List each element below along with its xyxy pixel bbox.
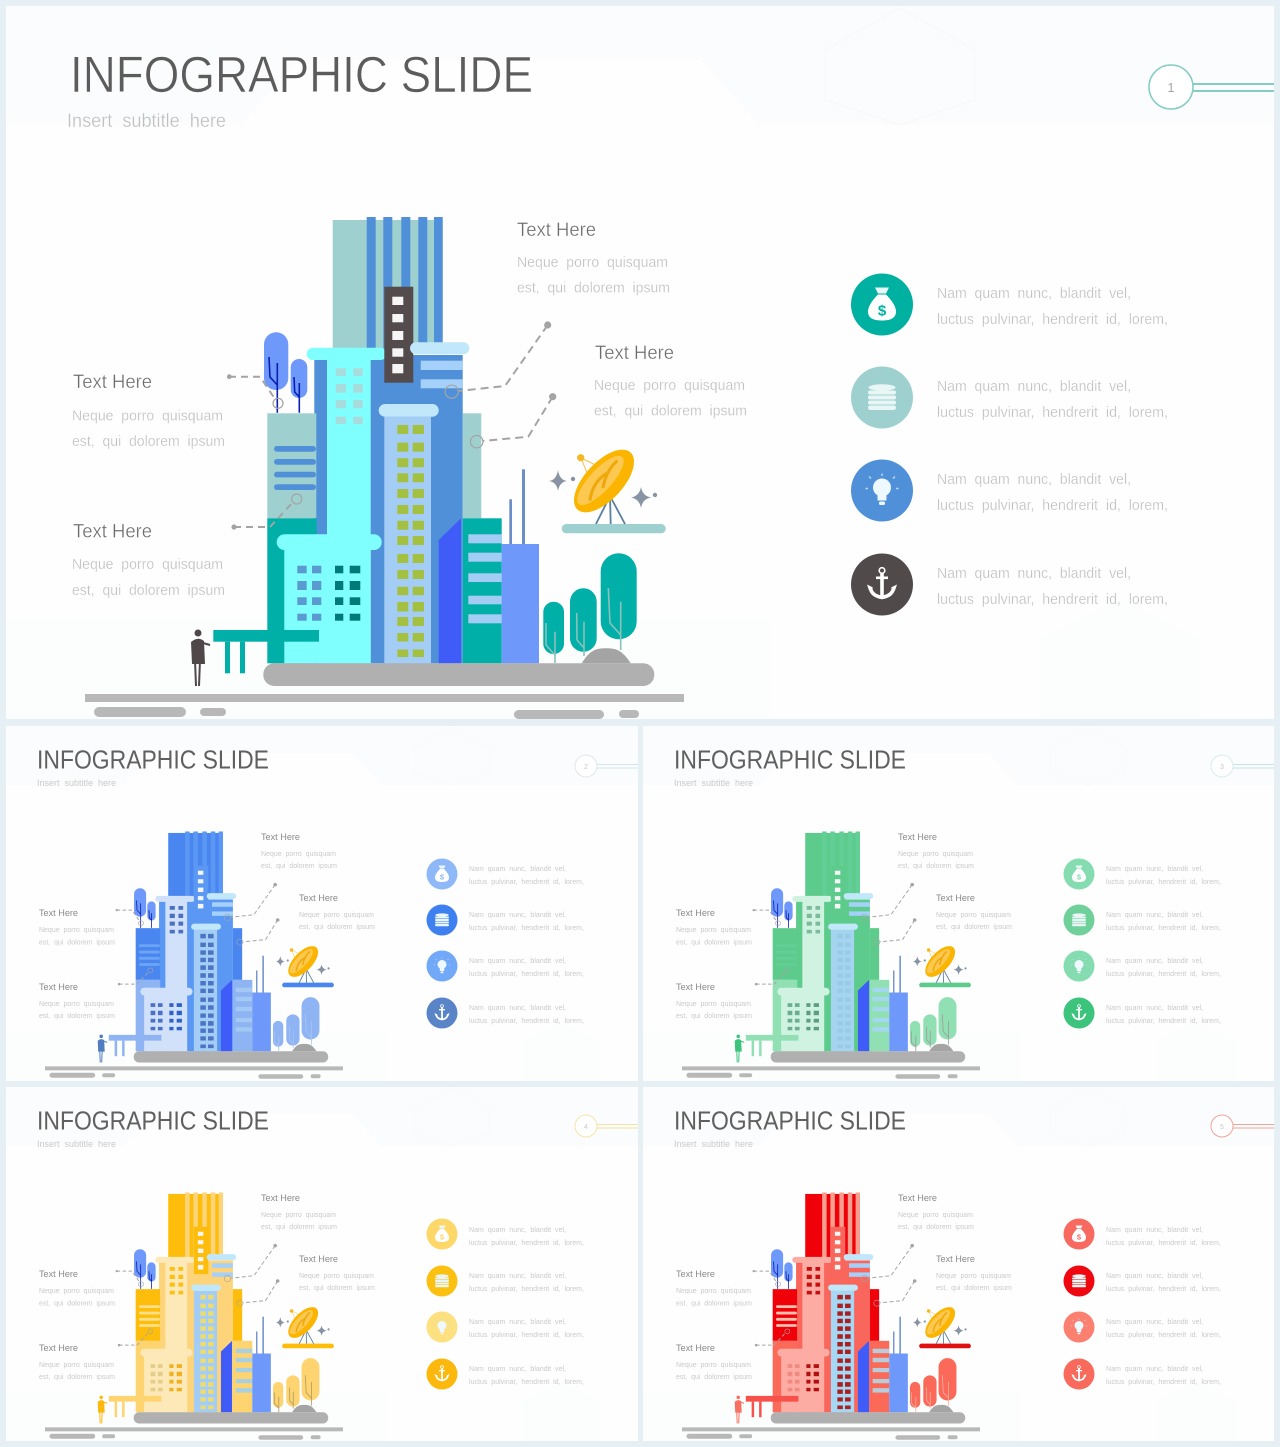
text: item four: luctus pulvinar, hendrerit id, lorem, <box>937 591 1168 608</box>
lower light block <box>277 534 382 663</box>
callout: left top: Text Here <box>676 1269 715 1280</box>
satellite dish <box>549 440 666 533</box>
callout: left top: Neque porro quisquam <box>676 925 751 934</box>
text: item one: luctus pulvinar, hendrerit id, lorem, <box>1106 1238 1221 1247</box>
text: item one <box>937 285 1168 328</box>
callout: left top <box>39 1269 115 1308</box>
callout: top centre <box>261 832 337 870</box>
callout: left bottom: Text Here <box>39 1343 78 1354</box>
icon: light bulb <box>426 1312 458 1342</box>
text: item two: Nam quam nunc, blandit vel, <box>937 378 1131 395</box>
icon: money bag <box>851 274 913 336</box>
callout: left bottom <box>39 1343 115 1381</box>
side block right <box>463 413 481 518</box>
panel: slide 3 (green) <box>643 726 1274 1081</box>
callout: right: Neque porro quisquam <box>299 910 374 919</box>
text: item one: luctus pulvinar, hendrerit id, lorem, <box>937 311 1168 328</box>
icon: coin stack <box>1064 904 1094 936</box>
leader line: right lower <box>470 393 556 448</box>
light tower <box>307 348 387 663</box>
text: item three: luctus pulvinar, hendrerit id, lorem, <box>469 969 584 978</box>
bench <box>213 630 319 673</box>
callout: left top: Neque porro quisquam <box>676 1286 751 1295</box>
text: item three <box>469 1317 584 1339</box>
callout: left bottom: Neque porro quisquam <box>676 1360 751 1369</box>
ground line <box>85 694 684 719</box>
callout: left bottom: est, qui dolorem ipsum <box>676 1372 752 1381</box>
icon: money bag: $ <box>878 302 887 320</box>
callout: top centre: Text Here <box>898 832 937 843</box>
subtitle: Insert subtitle here <box>37 1139 116 1150</box>
callout: top centre: Text Here <box>898 1193 937 1204</box>
text: item three: Nam quam nunc, blandit vel, <box>1106 956 1203 965</box>
subtitle: Insert subtitle here <box>674 778 753 789</box>
callout: left top: Text Here <box>676 908 715 919</box>
page number badge <box>1211 755 1274 777</box>
title: INFOGRAPHIC SLIDE <box>674 746 906 774</box>
text: item one: luctus pulvinar, hendrerit id, lorem, <box>469 1238 584 1247</box>
callout: left top: Neque porro quisquam <box>39 1286 114 1295</box>
callout: left bottom: Neque porro quisquam <box>676 999 751 1008</box>
callout: top centre: est, qui dolorem ipsum <box>261 861 337 870</box>
icon: anchor <box>851 554 913 616</box>
illustration: city building <box>85 217 684 719</box>
rooftop trees <box>264 332 307 413</box>
text: item one: Nam quam nunc, blandit vel, <box>469 1225 566 1234</box>
right lower block <box>463 518 502 663</box>
icon: anchor <box>1064 998 1094 1028</box>
callout: top centre: est, qui dolorem ipsum <box>517 280 670 296</box>
callout: right: Neque porro quisquam <box>594 377 745 394</box>
callout: top centre <box>517 220 670 296</box>
callout: top centre: Text Here <box>261 832 300 843</box>
text: item four <box>469 1003 584 1025</box>
panel: slide 4 (yellow) <box>6 1087 638 1441</box>
callout: left top: est, qui dolorem ipsum <box>676 1298 752 1308</box>
text: item four: luctus pulvinar, hendrerit id, lorem, <box>1106 1377 1221 1386</box>
text: item one <box>469 1225 584 1247</box>
icon: anchor <box>1064 1358 1094 1390</box>
icon: coin stack <box>426 1266 458 1296</box>
text: item three: Nam quam nunc, blandit vel, <box>937 471 1131 488</box>
callout: left bottom: est, qui dolorem ipsum <box>676 1011 752 1020</box>
subtitle: Insert subtitle here <box>674 1139 753 1150</box>
text: item two: Nam quam nunc, blandit vel, <box>1106 910 1203 919</box>
title: INFOGRAPHIC SLIDE <box>37 1108 269 1136</box>
callout: left top: est, qui dolorem ipsum <box>676 938 752 946</box>
text: item four: Nam quam nunc, blandit vel, <box>469 1364 566 1373</box>
callout: right: Neque porro quisquam <box>299 1271 374 1280</box>
callout: right: Neque porro quisquam <box>936 910 1011 919</box>
callout: left bottom: est, qui dolorem ipsum <box>39 1011 115 1020</box>
callout: left top: Text Here <box>39 908 78 919</box>
text: item one <box>469 864 584 886</box>
text: item one: Nam quam nunc, blandit vel, <box>1106 1225 1203 1234</box>
callout: left top: est, qui dolorem ipsum <box>39 1298 115 1308</box>
callout: top centre: est, qui dolorem ipsum <box>898 1222 974 1231</box>
callout: left top <box>39 908 115 946</box>
text: item two <box>1106 910 1221 932</box>
callout: left bottom <box>72 522 225 599</box>
back tower <box>333 217 443 350</box>
callout: left bottom: est, qui dolorem ipsum <box>39 1372 115 1381</box>
callout: right <box>594 343 747 420</box>
panel: slide 2 (blue) <box>6 726 638 1081</box>
icon: light bulb <box>1064 950 1094 982</box>
callout: top centre: Text Here <box>517 220 596 241</box>
callout: right: est, qui dolorem ipsum <box>936 922 1012 931</box>
callout: top centre: Neque porro quisquam <box>261 1210 336 1219</box>
text: item four <box>1106 1003 1221 1025</box>
callout: right: est, qui dolorem ipsum <box>936 1283 1012 1292</box>
lower left block <box>267 518 317 663</box>
callout: right: Text Here <box>299 1254 338 1265</box>
page number badge: 4 <box>584 1124 588 1131</box>
icon: anchor <box>426 1358 458 1390</box>
text: item four: Nam quam nunc, blandit vel, <box>469 1003 566 1012</box>
callout: left bottom: Text Here <box>39 982 78 993</box>
text: item two: luctus pulvinar, hendrerit id, lorem, <box>1106 1284 1221 1293</box>
callout: right: Text Here <box>936 893 975 904</box>
callout: right: Text Here <box>936 1254 975 1265</box>
callout: left top: est, qui dolorem ipsum <box>72 433 225 450</box>
callout: left bottom <box>676 982 752 1020</box>
text: item four <box>469 1364 584 1386</box>
callout: left top: Neque porro quisquam <box>39 925 114 934</box>
right roof and stripes <box>410 342 469 388</box>
callout: top centre <box>898 1193 974 1231</box>
slide background <box>6 6 1274 719</box>
page number badge <box>1149 65 1274 109</box>
text: item two <box>1106 1271 1221 1293</box>
callout: top centre: Neque porro quisquam <box>261 849 336 858</box>
text: item three: Nam quam nunc, blandit vel, <box>1106 1317 1203 1326</box>
side block left <box>267 413 316 518</box>
callout: left bottom: Text Here <box>676 982 715 993</box>
ground platform <box>263 648 654 686</box>
page number badge: 2 <box>584 764 588 771</box>
text: item four <box>937 565 1168 608</box>
callout: top centre <box>898 832 974 870</box>
slide background <box>643 726 1274 1081</box>
text: item one <box>1106 864 1221 886</box>
illustration: city building <box>682 831 980 1079</box>
text: item two <box>469 1271 584 1293</box>
callout: left top: Neque porro quisquam <box>72 408 223 424</box>
title: INFOGRAPHIC SLIDE <box>37 746 269 774</box>
text: item three: luctus pulvinar, hendrerit id, lorem, <box>1106 969 1221 978</box>
text: item one: Nam quam nunc, blandit vel, <box>937 285 1131 302</box>
text: item two: Nam quam nunc, blandit vel, <box>1106 1271 1203 1280</box>
main block <box>314 355 463 663</box>
illustration: city building <box>45 831 343 1079</box>
page number badge <box>1211 1115 1274 1137</box>
callout: right <box>936 1254 1012 1292</box>
callout: left top <box>72 372 225 450</box>
core with windows <box>384 287 413 383</box>
callout: left bottom: Text Here <box>73 522 152 542</box>
text: item one <box>1106 1225 1221 1247</box>
text: item four: luctus pulvinar, hendrerit id, lorem, <box>469 1377 584 1386</box>
icon: money bag <box>1064 858 1094 890</box>
text: item one: luctus pulvinar, hendrerit id, lorem, <box>1106 877 1221 886</box>
callout: right: est, qui dolorem ipsum <box>594 402 747 420</box>
icon: coin stack <box>426 904 458 936</box>
text: item two <box>469 910 584 932</box>
callout: left top <box>676 1269 752 1308</box>
callout: top centre: est, qui dolorem ipsum <box>261 1222 337 1231</box>
page number badge: 3 <box>1220 764 1224 771</box>
text: item three <box>1106 1317 1221 1339</box>
callout: left bottom: Text Here <box>676 1343 715 1354</box>
callout: right: est, qui dolorem ipsum <box>299 1283 375 1292</box>
text: item four: luctus pulvinar, hendrerit id, lorem, <box>469 1016 584 1025</box>
leader line: left bottom <box>231 494 302 530</box>
callout: top centre: Neque porro quisquam <box>517 254 668 271</box>
callout: left top: Text Here <box>39 1269 78 1280</box>
text: item three <box>469 956 584 978</box>
slanted accent building <box>439 518 461 663</box>
icon: light bulb <box>851 460 913 522</box>
panel: main slide (teal) <box>6 6 1274 719</box>
antenna block <box>502 469 539 663</box>
callout: top centre: Neque porro quisquam <box>898 849 973 858</box>
title: INFOGRAPHIC SLIDE <box>674 1108 906 1136</box>
callout: right: est, qui dolorem ipsum <box>299 922 375 931</box>
callout: top centre <box>261 1193 337 1231</box>
callout: left bottom <box>676 1343 752 1381</box>
callout: left bottom: Neque porro quisquam <box>39 999 114 1008</box>
text: item one: luctus pulvinar, hendrerit id, lorem, <box>469 877 584 886</box>
person <box>191 630 210 686</box>
callout: left top <box>676 908 752 946</box>
callout: left bottom: Neque porro quisquam <box>72 556 223 573</box>
callout: left top: est, qui dolorem ipsum <box>39 938 115 946</box>
text: item four: Nam quam nunc, blandit vel, <box>1106 1364 1203 1373</box>
title: INFOGRAPHIC SLIDE <box>70 46 533 103</box>
text: item two: luctus pulvinar, hendrerit id, lorem, <box>469 1284 584 1293</box>
callout: right <box>299 893 375 931</box>
slide background <box>643 1087 1274 1441</box>
slide background <box>6 726 638 1081</box>
leader line: left top <box>227 374 283 408</box>
icon: money bag <box>426 858 458 890</box>
callout: left bottom: est, qui dolorem ipsum <box>72 582 225 599</box>
callout: left bottom <box>39 982 115 1020</box>
callout: right: Neque porro quisquam <box>936 1271 1011 1280</box>
text: item two: luctus pulvinar, hendrerit id, lorem, <box>937 404 1168 421</box>
icon: coin stack <box>1064 1266 1094 1296</box>
callout: left bottom: Neque porro quisquam <box>39 1360 114 1369</box>
callout: right: Text Here <box>299 893 338 904</box>
page number badge: 5 <box>1220 1124 1224 1131</box>
callout: right: Text Here <box>595 343 674 364</box>
callout: top centre: Neque porro quisquam <box>898 1210 973 1219</box>
callout: top centre: Text Here <box>261 1193 300 1204</box>
page number badge: 1 <box>1167 80 1175 95</box>
callout: right <box>299 1254 375 1292</box>
text: item four: luctus pulvinar, hendrerit id, lorem, <box>1106 1016 1221 1025</box>
text: item four: Nam quam nunc, blandit vel, <box>1106 1003 1203 1012</box>
subtitle: Insert subtitle here <box>37 778 116 789</box>
text: item three: luctus pulvinar, hendrerit id, lorem, <box>1106 1330 1221 1339</box>
text: item three: Nam quam nunc, blandit vel, <box>469 1317 566 1326</box>
panel: slide 5 (red) <box>643 1087 1274 1441</box>
text: item three <box>1106 956 1221 978</box>
icon: money bag <box>426 1218 458 1250</box>
text: item three: luctus pulvinar, hendrerit id, lorem, <box>469 1330 584 1339</box>
text: item three <box>937 471 1168 514</box>
street trees <box>543 553 637 663</box>
text: item two <box>937 378 1168 421</box>
icon: coin stack <box>851 366 913 428</box>
icon: light bulb <box>426 950 458 982</box>
page number badge <box>575 1115 638 1137</box>
text: item two: Nam quam nunc, blandit vel, <box>469 1271 566 1280</box>
text: item one: Nam quam nunc, blandit vel, <box>1106 864 1203 873</box>
callout: right <box>936 893 1012 931</box>
text: item four: Nam quam nunc, blandit vel, <box>937 565 1131 582</box>
callout: top centre: est, qui dolorem ipsum <box>898 861 974 870</box>
page number badge <box>575 755 638 777</box>
text: item two: Nam quam nunc, blandit vel, <box>469 910 566 919</box>
text: item two: luctus pulvinar, hendrerit id, lorem, <box>469 923 584 932</box>
text: item one: Nam quam nunc, blandit vel, <box>469 864 566 873</box>
slide background <box>6 1087 638 1441</box>
text: item four <box>1106 1364 1221 1386</box>
callout: left top: Text Here <box>73 372 152 393</box>
text: item three: Nam quam nunc, blandit vel, <box>469 956 566 965</box>
text: item three: luctus pulvinar, hendrerit id, lorem, <box>937 497 1168 514</box>
subtitle: Insert subtitle here <box>67 111 226 132</box>
illustration: city building <box>682 1192 980 1440</box>
icon: money bag <box>1064 1218 1094 1250</box>
tall window tower <box>379 404 439 663</box>
text: item two: luctus pulvinar, hendrerit id, lorem, <box>1106 923 1221 932</box>
illustration: city building <box>45 1192 343 1440</box>
leader line: right upper <box>445 321 551 398</box>
icon: anchor <box>426 998 458 1028</box>
icon: light bulb <box>1064 1312 1094 1342</box>
